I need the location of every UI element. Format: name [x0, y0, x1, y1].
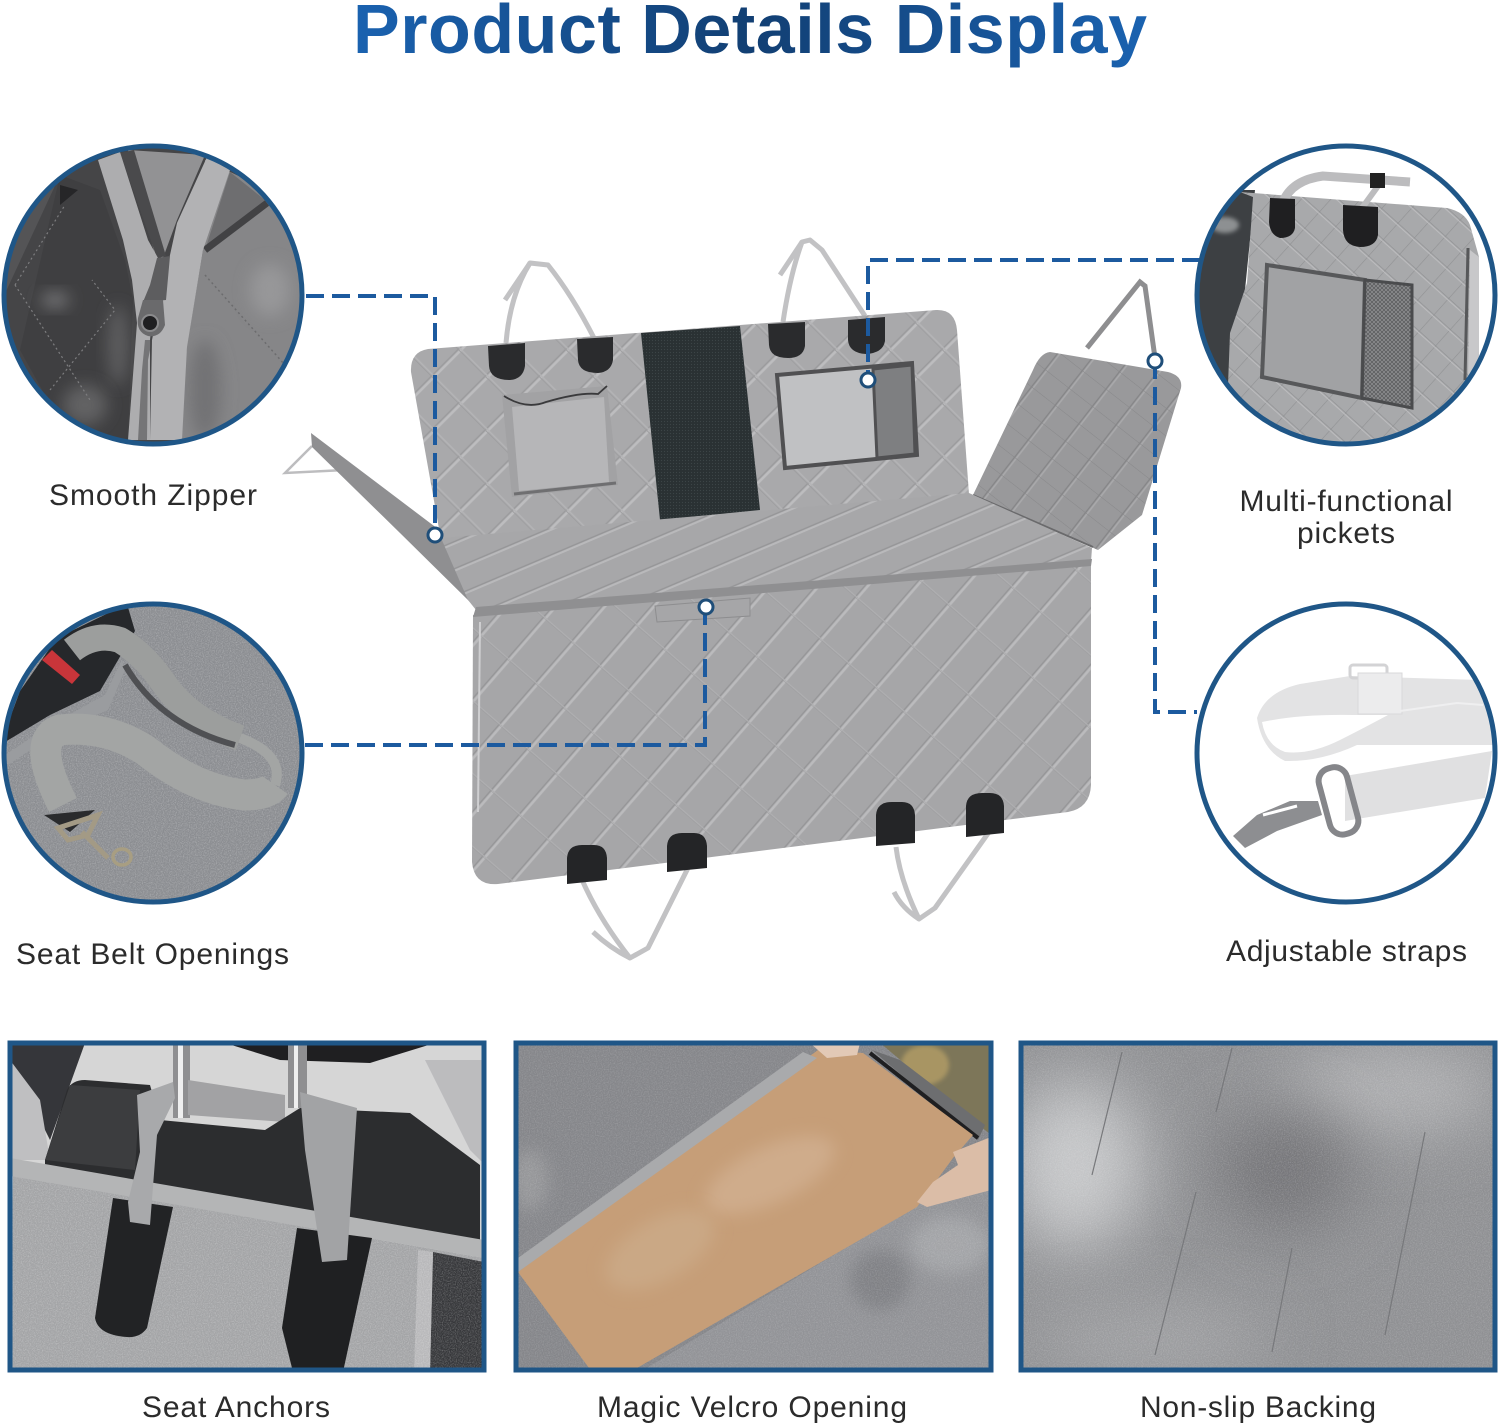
panel: non-slip backing [1005, 1043, 1500, 1370]
circle: smooth zipper [0, 140, 310, 450]
seat edge [872, 1050, 985, 1140]
strap loop [1257, 676, 1497, 761]
grass background [880, 1043, 991, 1135]
red buckle [42, 650, 80, 684]
callout line: straps [1155, 361, 1197, 712]
label: Multi-functional pickets: Multi-functional [1240, 485, 1452, 518]
slider buckle [1350, 665, 1387, 678]
inner grey triangle [128, 150, 205, 258]
bottom straps [583, 832, 989, 958]
tan board [518, 1050, 973, 1372]
quilted cover body [1228, 192, 1479, 447]
callout line: pockets [868, 260, 1200, 380]
label: Seat Anchors: Seat Anchors [142, 1391, 330, 1424]
label: Seat Belt Openings: Seat Belt Openings [16, 938, 289, 971]
cover top hem [10, 1158, 484, 1258]
panel: magic velcro opening [512, 1043, 991, 1372]
circle: seat belt openings [0, 600, 310, 910]
black seat back [45, 1080, 480, 1245]
callout line: zipper [306, 296, 435, 535]
closed pouch pocket [502, 386, 618, 497]
hands [810, 1043, 860, 1058]
seat cover product illustration [285, 240, 1181, 958]
right side slot [1465, 248, 1468, 380]
top straps [1283, 176, 1410, 202]
clear window pocket [777, 363, 917, 468]
webbing straps [128, 1082, 175, 1225]
label: Smooth Zipper: Smooth Zipper [49, 479, 257, 512]
lower strap loop [240, 738, 277, 785]
zipper tapes [98, 152, 158, 440]
quilting seams [1092, 1048, 1425, 1355]
zipper pull [143, 256, 170, 302]
elastic band [188, 1080, 285, 1122]
swivel ring [1316, 764, 1361, 837]
dark quilted lining [20, 175, 133, 440]
label: Non-slip Backing: Non-slip Backing [1140, 1391, 1376, 1424]
headrest posts [173, 1043, 307, 1118]
label: Magic Velcro Opening: Magic Velcro Opening [597, 1391, 907, 1424]
left side flap with strap [285, 433, 478, 604]
panel: seat anchors [10, 1043, 490, 1372]
dark seat side [1200, 190, 1255, 382]
label: Multi-functional pickets [1240, 485, 1452, 550]
folded hem [518, 1052, 817, 1272]
seat middle band [441, 493, 1092, 610]
clip and hook [44, 810, 95, 832]
snap hook [1233, 801, 1322, 848]
mesh pocket [430, 1252, 484, 1372]
mesh pocket [1362, 280, 1412, 408]
top anchors [488, 317, 885, 380]
right side flap with strap [973, 282, 1181, 550]
grey fabric right [182, 160, 300, 438]
cover fabric [10, 1176, 484, 1372]
bottom anchors [567, 793, 1004, 884]
label: Multi-functional pickets: pickets [1297, 517, 1395, 550]
zipper teeth [128, 150, 165, 257]
dashed callout lines [305, 260, 1200, 745]
top straps [505, 240, 865, 343]
lower strap [1345, 751, 1492, 821]
flat pocket [1262, 265, 1365, 398]
side straps and seat [10, 1043, 85, 1140]
callout line: seat belt [305, 607, 705, 745]
upper strap [72, 638, 240, 738]
dark seat opening [7, 608, 135, 741]
label: Adjustable straps: Adjustable straps [1226, 935, 1467, 968]
leather tabs [95, 1198, 173, 1337]
black mesh centre window [641, 326, 760, 520]
circle: multi-functional pockets [1190, 145, 1497, 447]
front lower panel [472, 559, 1092, 884]
upper back panel [411, 310, 969, 540]
callout dots [428, 354, 1162, 614]
circle: adjustable straps [1195, 603, 1497, 905]
leather anchors [1269, 198, 1295, 238]
